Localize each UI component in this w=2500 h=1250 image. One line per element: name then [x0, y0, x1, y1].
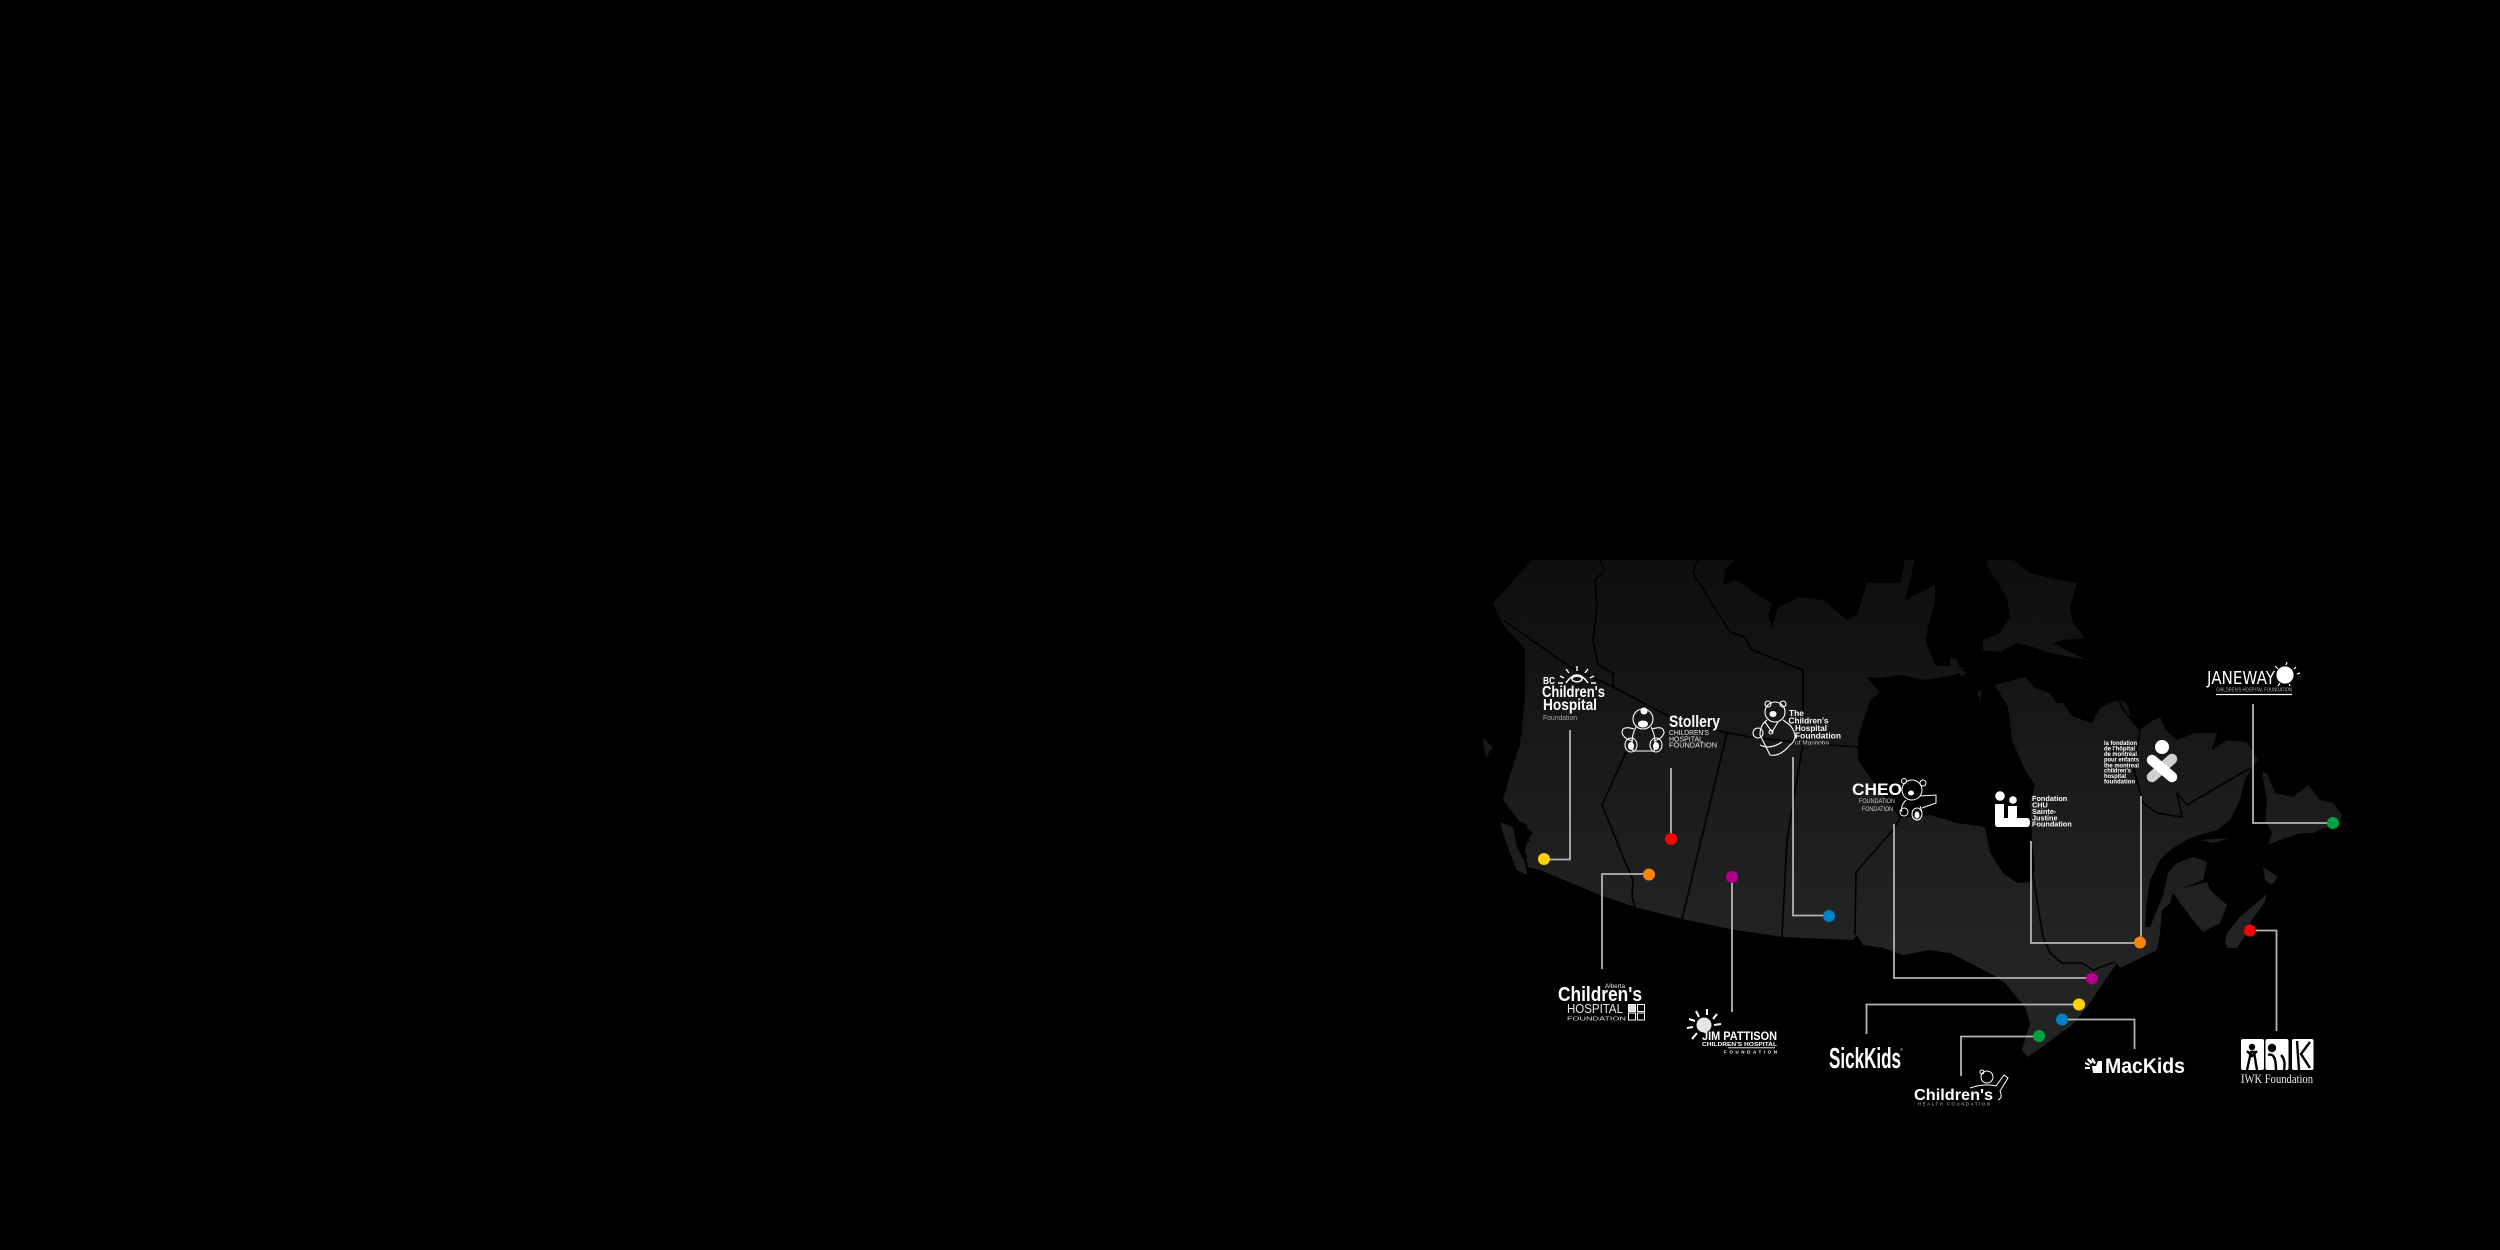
logo: Stollery Children's Hospital Foundation: HOSPITAL: [1669, 734, 1703, 744]
icon: Montreal figure: [2152, 740, 2172, 777]
logo: Janeway Children's Hospital Foundation: JANEWAY: [2206, 668, 2276, 689]
logo: CHEO Foundation: CHEO: [1852, 780, 1902, 799]
logo: Jim Pattison Children's Hospital Foundation: JIM PATTISON: [1702, 1031, 1777, 1043]
logo: Alberta Children's Hospital Foundation: Children's: [1558, 984, 1642, 1006]
logo: Montreal Children's Hospital Foundation: hospital: [2104, 774, 2126, 780]
logo: Fondation CHU Sainte-Justine Foundation: Foundation: [2032, 820, 2072, 828]
icon: Alberta squares: [1628, 1004, 1644, 1020]
logo: The Children's Hospital Foundation of Manitoba: The: [1789, 708, 1804, 718]
Nova Scotia: [2225, 894, 2267, 948]
logo: Fondation CHU Sainte-Justine Foundation: [1995, 791, 2072, 828]
logo: IWK Foundation: [2241, 1039, 2314, 1086]
small arctic islands: [1950, 657, 1982, 702]
logo: IWK Foundation: IWK Foundation: [2241, 1071, 2313, 1086]
logo: Jim Pattison Children's Hospital Foundation: CHILDREN'S HOSPITAL: [1702, 1042, 1778, 1048]
logo: Montreal Children's Hospital Foundation: de l'hôpital: [2104, 746, 2135, 752]
Baffin Island: [1983, 560, 2087, 660]
logo: Fondation CHU Sainte-Justine Foundation: Fondation: [2032, 794, 2067, 803]
logo: Montreal Children's Hospital Foundation: la fondation: [2104, 741, 2137, 747]
logo: SickKids: [1829, 1043, 1903, 1075]
Vancouver Island: [1500, 822, 1527, 875]
logo: CHEO Foundation: [1852, 778, 1936, 820]
logo: Janeway Children's Hospital Foundation: [2206, 662, 2300, 694]
Haida Gwaii: [1483, 738, 1493, 757]
New Brunswick: [2173, 882, 2227, 932]
logo: Alberta Children's Hospital Foundation: Alberta: [1605, 983, 1625, 990]
logo: Children's Health Foundation: HEALTH FOUNDATION: [1918, 1102, 1990, 1106]
logo: Fondation CHU Sainte-Justine Foundation: Sainte-: [2032, 807, 2057, 816]
icon: Janeway sun: [2275, 662, 2300, 686]
logo: Children's Health Foundation: [1914, 1070, 2008, 1106]
logo: MacKids: MacKids: [2105, 1055, 2185, 1078]
mainland: [1493, 560, 2258, 1057]
logo: Stollery Children's Hospital Foundation: [1622, 708, 1720, 752]
logo: The Children's Hospital Foundation of Manitoba: Children's: [1788, 716, 1829, 726]
logo: Janeway Children's Hospital Foundation: CHILDREN'S HOSPITAL FOUNDATION: [2216, 688, 2292, 694]
logo: Montreal Children's Hospital Foundation: the montreal: [2104, 764, 2139, 770]
logo: SickKids: ®: [1900, 1047, 1903, 1052]
logo: The Children's Hospital Foundation of Manitoba: [1753, 701, 1841, 755]
logo: BC Children's Hospital Foundation: Children's: [1542, 684, 1605, 701]
logo: Children's Health Foundation: Children's: [1914, 1087, 1993, 1104]
logo: Stollery Children's Hospital Foundation: Stollery: [1669, 712, 1720, 731]
location dots: [1538, 817, 2339, 1042]
logo: Jim Pattison Children's Hospital Foundation: FOUNDATION: [1724, 1050, 1777, 1054]
logo: Montreal Children's Hospital Foundation: de montréal: [2104, 752, 2137, 758]
logo: SickKids: SickKids: [1829, 1043, 1901, 1075]
province borders: [1503, 560, 2250, 970]
Cape Breton: [2263, 867, 2278, 885]
icon: Stollery bear: [1622, 708, 1664, 752]
logo: Montreal Children's Hospital Foundation: [2104, 740, 2172, 786]
logo: Alberta Children's Hospital Foundation: HOSPITAL: [1567, 1002, 1623, 1016]
logo: Jim Pattison Children's Hospital Foundation: [1687, 1009, 1778, 1054]
logo: Alberta Children's Hospital Foundation: [1558, 983, 1644, 1022]
Anticosti: [2200, 838, 2230, 843]
logo: CHEO Foundation: FONDATION: [1862, 807, 1893, 813]
logo: Stollery Children's Hospital Foundation: CHILDREN'S: [1669, 728, 1709, 737]
logo: BC Children's Hospital Foundation: [1542, 666, 1605, 722]
icon: MacKids hand: [2085, 1058, 2102, 1073]
lake: [1995, 852, 2008, 858]
Newfoundland: [2262, 772, 2342, 845]
logo: Montreal Children's Hospital Foundation: children's: [2104, 769, 2132, 775]
icon: Children's Health bear: [1970, 1070, 2008, 1100]
icon: Manitoba bear: [1753, 701, 1795, 755]
logo: Fondation CHU Sainte-Justine Foundation: Justine: [2032, 814, 2058, 822]
icon: IWK panels: [2241, 1039, 2314, 1070]
logo: Montreal Children's Hospital Foundation: foundation: [2104, 780, 2135, 786]
logo: BC Children's Hospital Foundation: BC: [1543, 675, 1555, 687]
logo: The Children's Hospital Foundation of Manitoba: of Manitoba: [1795, 740, 1830, 746]
logo: Montreal Children's Hospital Foundation: pour enfants: [2104, 757, 2140, 763]
leader lines: [1544, 704, 2333, 1076]
icon: CHU figures: [1995, 791, 2030, 827]
logo: Fondation CHU Sainte-Justine Foundation: CHU: [2032, 800, 2048, 810]
logo: Stollery Children's Hospital Foundation: FOUNDATION: [1669, 740, 1717, 750]
logo: The Children's Hospital Foundation of Manitoba: Hospital: [1795, 723, 1827, 733]
logo: BC Children's Hospital Foundation: Hospital: [1543, 697, 1597, 714]
logo: BC Children's Hospital Foundation: Foundation: [1543, 713, 1577, 722]
icon: CHEO bear: [1900, 778, 1936, 820]
logo: CHEO Foundation: FOUNDATION: [1859, 799, 1895, 805]
map of Canada: [1483, 560, 2342, 1057]
logo: Alberta Children's Hospital Foundation: FOUNDATION: [1567, 1016, 1626, 1022]
icon: BC sun: [1558, 666, 1596, 683]
arctic water: [1723, 560, 1905, 628]
logo: The Children's Hospital Foundation of Manitoba: Foundation: [1795, 730, 1841, 740]
icon: Jim Pattison sun: [1687, 1009, 1721, 1039]
